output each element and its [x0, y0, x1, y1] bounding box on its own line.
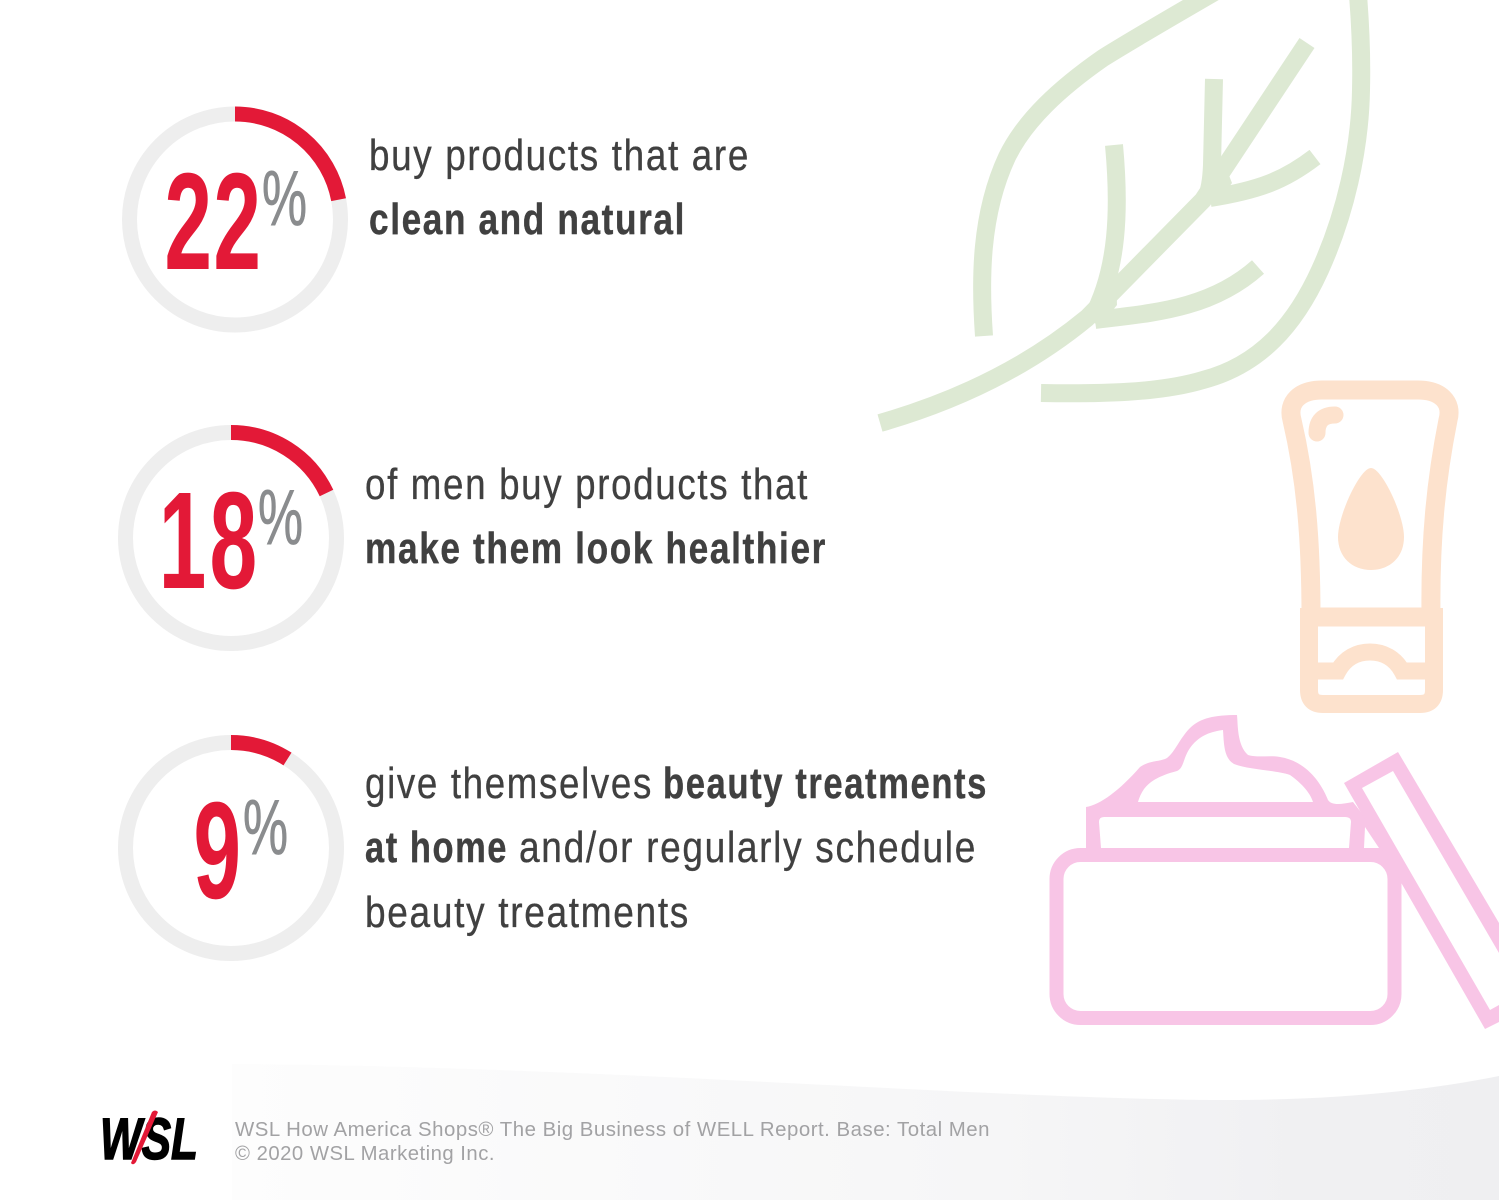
number: 9%: %: [243, 783, 288, 871]
text: beauty treatments: beauty treatments: [663, 759, 988, 808]
text: beauty treatments: give themselves: [365, 759, 653, 808]
icon: lotion tube: [1291, 390, 1449, 704]
logo: WSL: WSL: [100, 1107, 198, 1172]
text: clean and natural: buy products that are: [369, 131, 750, 180]
donut chart: 9 percent: [126, 742, 336, 954]
text: beauty treatments: and/or regularly schedule: [519, 823, 977, 872]
number: 18%: %: [258, 473, 303, 561]
donut chart: 22 percent: [130, 114, 340, 325]
text: clean and natural: [369, 131, 750, 244]
icon: cream jar: [1056, 715, 1499, 1029]
number: 18%: 18: [159, 464, 257, 618]
source text: [235, 1118, 990, 1165]
number: 9%: 9: [193, 774, 241, 928]
stat: 22 percent: [130, 114, 750, 325]
number: 22%: %: [262, 154, 307, 242]
text: beauty treatments: [365, 759, 988, 937]
text: make them look healthier: of men buy products that: [365, 460, 809, 509]
source text: © 2020 WSL Marketing Inc.: [235, 1142, 495, 1165]
text: make them look healthier: make them look healthier: [365, 524, 827, 573]
footer band: [232, 1064, 1499, 1200]
text: beauty treatments: beauty treatments: [365, 888, 690, 937]
number: 22%: 22: [164, 145, 261, 299]
stat: 18 percent: [126, 432, 827, 644]
stat: 9 percent: [126, 742, 988, 954]
text: clean and natural: clean and natural: [369, 195, 686, 244]
number: 22%: [164, 145, 307, 299]
number: 18%: [159, 464, 303, 618]
icon: leaf: [880, 0, 1361, 423]
donut chart: 18 percent: [126, 432, 336, 644]
source text: WSL How America Shops® The Big Business of WELL Report. Base: Total Men: [235, 1118, 990, 1141]
number: 9%: [193, 774, 288, 928]
text: beauty treatments: at home: [365, 823, 508, 872]
text: make them look healthier: [365, 460, 827, 573]
